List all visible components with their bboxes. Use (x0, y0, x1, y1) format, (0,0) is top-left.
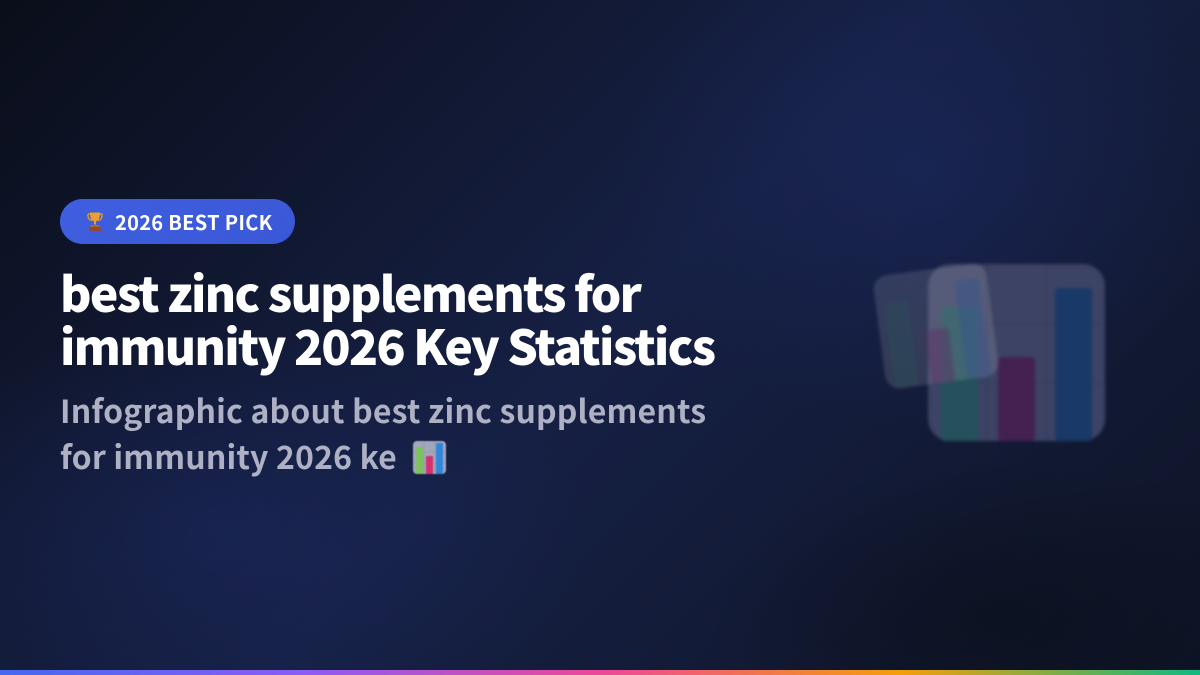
subtitle: Infographic about best zinc supplements (60, 387, 706, 433)
title (60, 256, 715, 379)
rainbow bottom bar (0, 670, 1200, 675)
decorative chart icon, blurred (873, 262, 1106, 442)
small tilted chart panel (872, 262, 1000, 390)
subtitle (60, 387, 706, 479)
large chart panel (928, 264, 1105, 441)
title: immunity 2026 Key Statistics (60, 309, 714, 379)
badge label: 2026 BEST PICK (115, 207, 273, 236)
icon: small bar chart emoji (412, 440, 447, 475)
subtitle: for immunity 2026 ke (60, 433, 397, 479)
category badge (60, 199, 295, 244)
icon: trophy (87, 212, 103, 231)
title: best zinc supplements for (60, 256, 640, 326)
